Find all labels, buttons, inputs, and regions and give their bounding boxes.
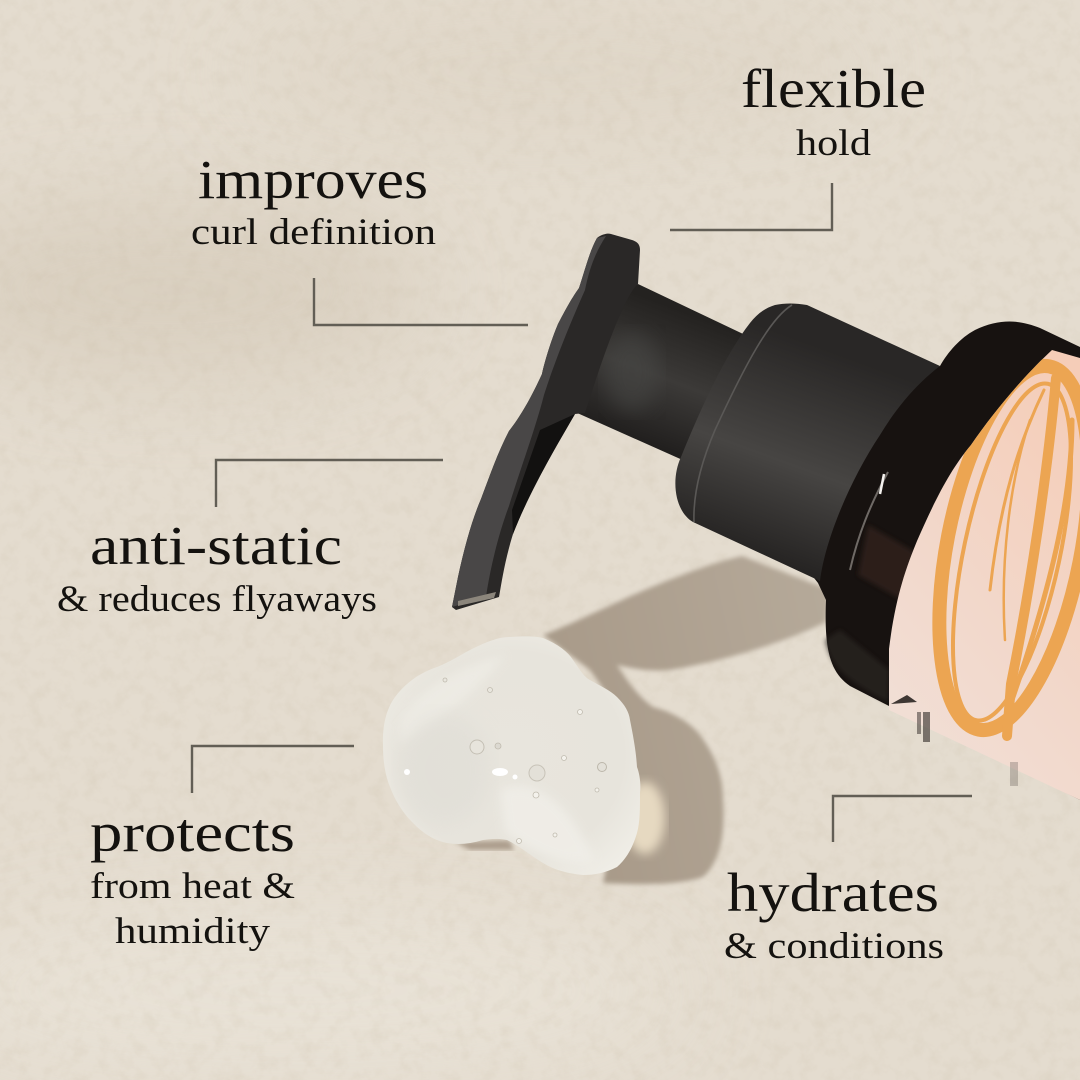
callout: protects from heat and humidity — [90, 746, 354, 951]
label: peach wrap — [889, 350, 1080, 800]
callout: hydrates and conditions: & conditions — [724, 925, 944, 966]
callout: flexible hold — [670, 58, 926, 230]
pump stem — [575, 284, 760, 470]
callout: protects from heat and humidity: protects — [90, 802, 295, 863]
pump actuator and nozzle — [452, 234, 640, 610]
pump bottle — [452, 234, 1080, 800]
callout: hydrates and conditions — [724, 796, 972, 966]
callout: anti-static and reduces flyaways — [57, 460, 443, 619]
callout: hydrates and conditions: hydrates — [727, 862, 939, 923]
pump collar — [675, 304, 940, 581]
callout: protects from heat and humidity: humidity — [115, 910, 271, 951]
callout: anti-static and reduces flyaways: & reduces flyaways — [57, 578, 377, 619]
callout: flexible hold: hold — [796, 122, 871, 163]
label: small print — [891, 695, 1018, 786]
collar ring groove — [694, 305, 792, 522]
callout: flexible hold: flexible — [741, 58, 926, 119]
gel dollop — [383, 636, 640, 875]
bottle and gel cast shadows — [455, 556, 830, 884]
stem highlight — [604, 332, 660, 412]
callout: improves curl definition: improves — [198, 149, 428, 210]
callout: protects from heat and humidity: from heat & — [90, 865, 295, 906]
label: orange scribble logo — [932, 358, 1080, 741]
callout: improves curl definition — [191, 149, 528, 325]
callout: anti-static and reduces flyaways: anti-static — [90, 515, 342, 576]
bottle body: dark glass — [800, 322, 1080, 800]
glass reflections — [850, 472, 888, 570]
nozzle textured face — [452, 236, 606, 607]
callout: improves curl definition: curl definition — [191, 211, 436, 252]
